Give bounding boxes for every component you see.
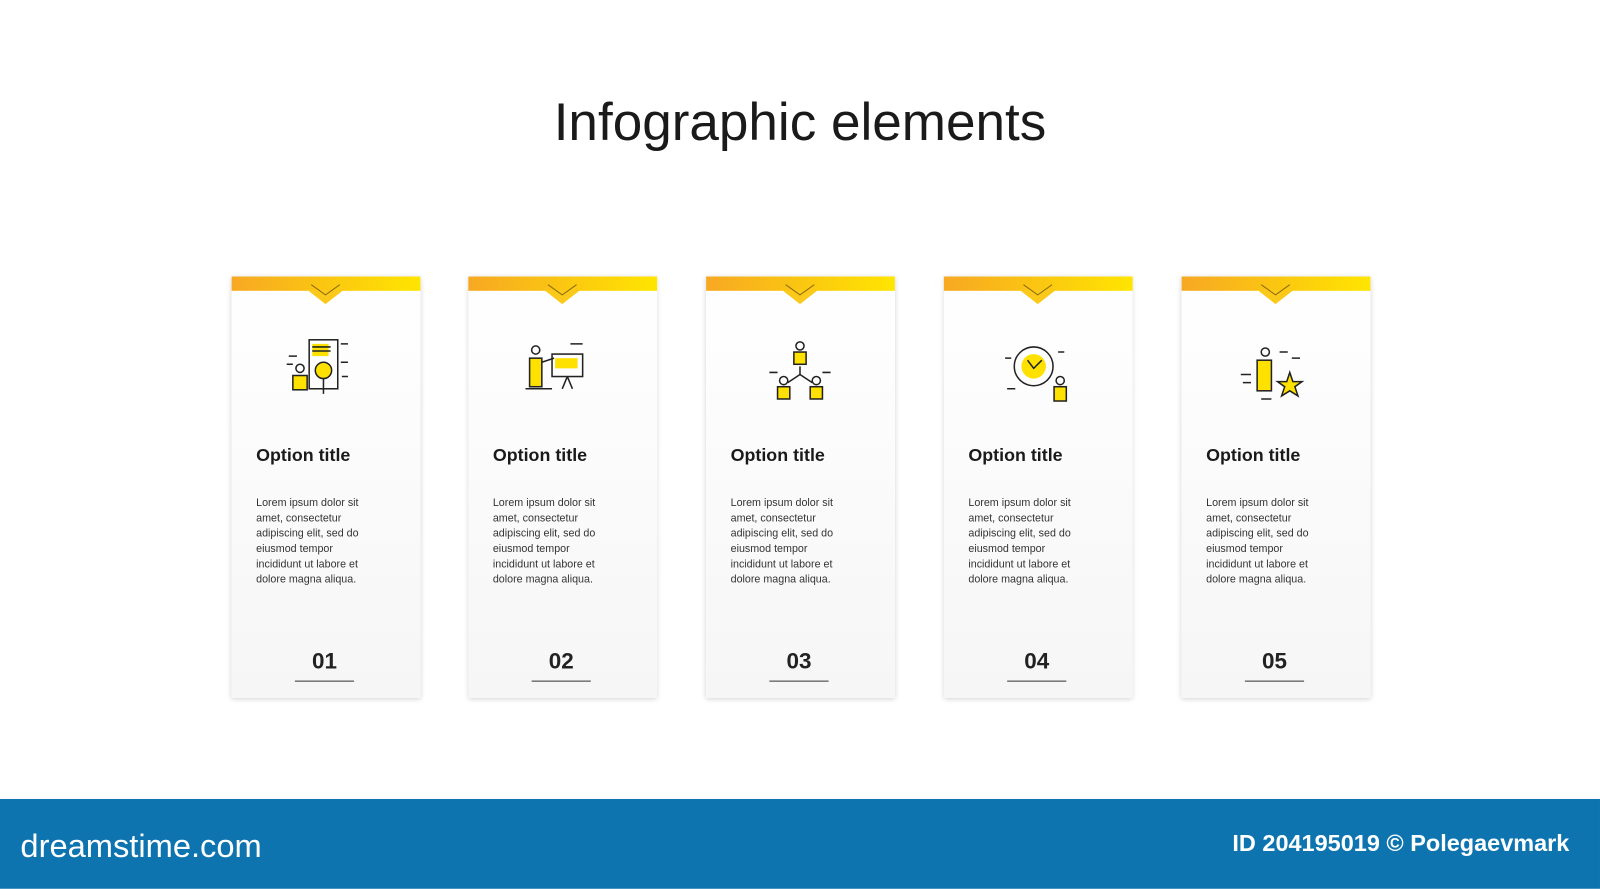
text: Lorem ipsum dolor sit amet, consectetur adipiscing elit, sed do eiusmod tempor incididunt ut labore et dolore magna aliqua. (968, 497, 1071, 586)
footer logo: dreamstime.com (20, 828, 262, 864)
panel: card 01 (232, 277, 420, 698)
number (1245, 648, 1304, 682)
icon: person star (1240, 347, 1304, 400)
footer id: ID 204195019 © Polegaevmark (1232, 830, 1569, 856)
text: Lorem ipsum dolor sit amet, consectetur adipiscing elit, sed do eiusmod tempor incididunt ut labore et dolore magna aliqua. (256, 497, 359, 586)
panel: card 02 (468, 277, 657, 698)
number: 01 (312, 648, 337, 673)
number: 03 (786, 648, 811, 673)
text: Lorem ipsum dolor sit amet, consectetur adipiscing elit, sed do eiusmod tempor incididunt ut labore et dolore magna aliqua. (1206, 497, 1309, 586)
number: 05 (1262, 648, 1287, 673)
text: Lorem ipsum dolor sit amet, consectetur adipiscing elit, sed do eiusmod tempor incididunt ut labore et dolore magna aliqua. (731, 497, 833, 586)
panel: card 04 (944, 277, 1133, 698)
icon: document search (286, 339, 348, 394)
title: Infographic elements (554, 93, 1046, 152)
footer (0, 799, 1600, 889)
number: 04 (1024, 648, 1049, 673)
heading: Option title (256, 445, 350, 465)
number: 02 (549, 648, 574, 673)
panel: card 05 (1182, 277, 1370, 698)
number (295, 648, 354, 682)
number (532, 648, 591, 682)
icon: clock person (1005, 346, 1068, 402)
number (1007, 648, 1066, 682)
heading: Option title (1206, 445, 1300, 465)
icon: team (769, 341, 831, 400)
heading: Option title (968, 445, 1063, 465)
text: Lorem ipsum dolor sit amet, consectetur adipiscing elit, sed do eiusmod tempor incididunt ut labore et dolore magna aliqua. (493, 497, 595, 586)
number (769, 648, 829, 682)
heading: Option title (731, 445, 825, 465)
icon: presenter (526, 343, 584, 390)
panel: card 03 (706, 277, 895, 698)
heading: Option title (493, 445, 587, 465)
